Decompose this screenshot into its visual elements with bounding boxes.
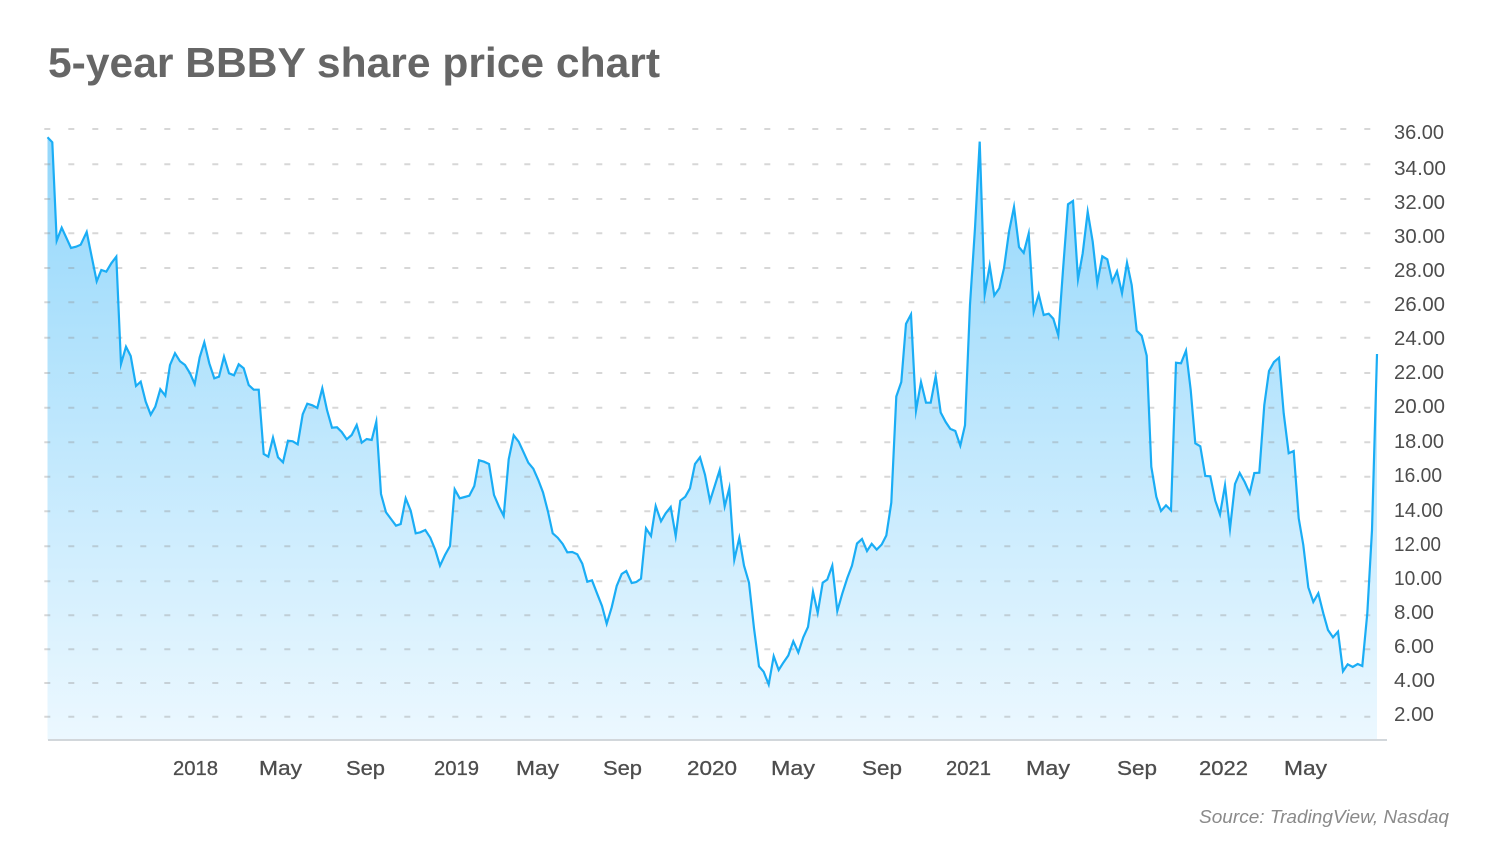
x-axis labels: May: [1026, 757, 1071, 780]
y-axis labels: 14.00: [1394, 500, 1443, 522]
x-axis labels: 2021: [946, 757, 991, 780]
x-axis labels: Sep: [346, 757, 385, 780]
x-axis labels: 2020: [687, 757, 737, 780]
y-axis labels: 18.00: [1394, 431, 1444, 453]
y-axis labels: 32.00: [1394, 192, 1445, 214]
y-axis labels: 26.00: [1394, 294, 1445, 316]
y-axis labels: 10.00: [1394, 568, 1442, 590]
area fill under price line: [48, 137, 1377, 740]
x-axis labels: 2019: [434, 757, 479, 780]
y-axis labels: 12.00: [1394, 534, 1441, 556]
x-axis labels: Sep: [862, 757, 902, 780]
price line: [48, 137, 1377, 685]
y-axis labels: 24.00: [1394, 328, 1445, 350]
y-axis labels: 20.00: [1394, 396, 1445, 418]
x-axis labels: Sep: [603, 757, 642, 780]
y-axis labels: 34.00: [1394, 158, 1446, 180]
x-axis labels: May: [259, 757, 303, 780]
x-axis labels: May: [771, 757, 816, 780]
y-axis labels: 28.00: [1394, 260, 1445, 282]
y-axis labels: 6.00: [1394, 636, 1434, 658]
y-axis labels: 22.00: [1394, 362, 1444, 384]
source note: Source: TradingView, Nasdaq: [1199, 807, 1449, 827]
x-axis labels: Sep: [1117, 757, 1157, 780]
title: 5-year BBBY share price chart: [48, 39, 660, 86]
x-axis labels: [173, 757, 1328, 780]
y-axis labels: 16.00: [1394, 465, 1442, 487]
x-axis baseline: [48, 739, 1387, 741]
x-axis labels: 2018: [173, 757, 218, 780]
x-axis labels: 2022: [1199, 757, 1248, 780]
y-axis labels: 2.00: [1394, 704, 1434, 726]
y-axis labels: 30.00: [1394, 226, 1445, 248]
y-axis labels: 8.00: [1394, 602, 1434, 624]
y-axis labels: [1394, 122, 1446, 726]
x-axis labels: May: [1284, 757, 1328, 780]
y-axis labels: 4.00: [1394, 670, 1435, 692]
area chart: share price: [44, 129, 1387, 741]
y-axis labels: 36.00: [1394, 122, 1444, 144]
x-axis labels: May: [516, 757, 560, 780]
